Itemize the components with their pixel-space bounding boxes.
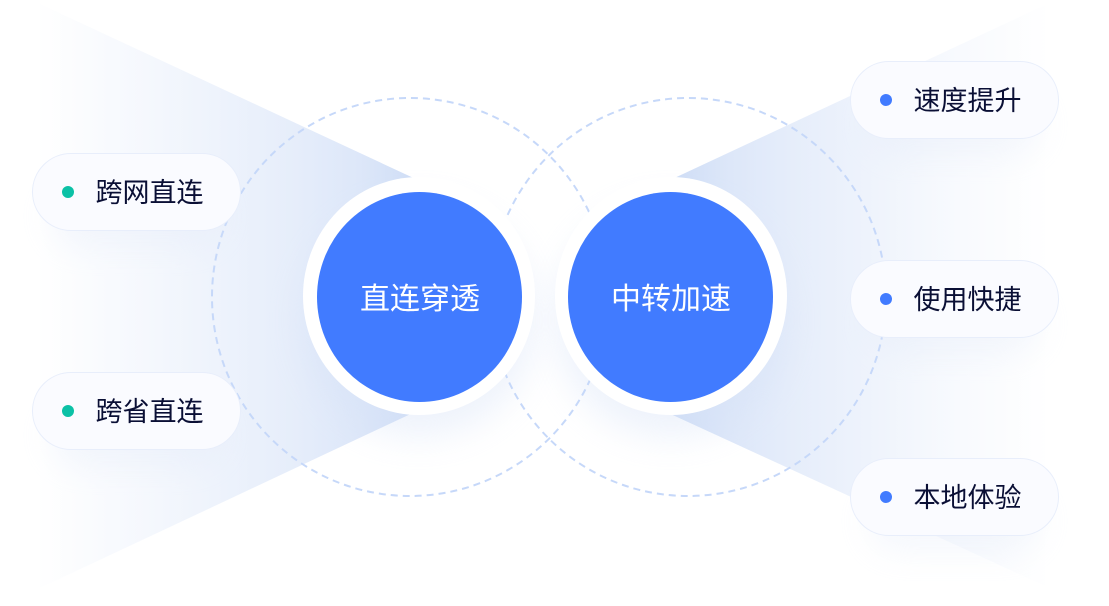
pill: 使用快捷 bbox=[850, 260, 1058, 354]
pill: 本地体验 bbox=[850, 458, 1058, 552]
pill: 跨省直连 bbox=[32, 372, 240, 466]
wedge: lower right light beam bbox=[664, 297, 1045, 586]
glow: soft halo beneath right node bbox=[555, 204, 787, 436]
pill: 跨网直连 bbox=[32, 154, 240, 247]
dashed orbit: left bbox=[212, 98, 608, 496]
dot: green bbox=[62, 186, 74, 198]
node: 直连穿透 bbox=[303, 177, 535, 415]
dot: blue bbox=[880, 293, 892, 305]
pill: 速度提升: 速度提升 bbox=[914, 86, 1022, 116]
pill: 本地体验: 本地体验 bbox=[914, 483, 1022, 513]
node: 中转加速: 中转加速 bbox=[611, 283, 731, 316]
pill: 跨省直连: 跨省直连 bbox=[96, 397, 204, 427]
pill: 跨网直连: 跨网直连 bbox=[96, 178, 204, 208]
pill: 使用快捷: 使用快捷 bbox=[914, 285, 1022, 315]
dot: green bbox=[62, 405, 74, 417]
dot: blue bbox=[880, 94, 892, 106]
dashed orbit: right bbox=[490, 98, 886, 496]
node: 中转加速 bbox=[555, 177, 787, 415]
glow: soft halo beneath left node bbox=[303, 204, 535, 436]
wedge: upper left light beam bbox=[40, 4, 420, 297]
dot: blue bbox=[880, 491, 892, 503]
node: 直连穿透: 直连穿透 bbox=[360, 283, 480, 316]
pill: 速度提升 bbox=[850, 62, 1058, 155]
wedge: lower left light beam bbox=[40, 297, 419, 588]
wedge: upper right light beam bbox=[668, 5, 1045, 297]
